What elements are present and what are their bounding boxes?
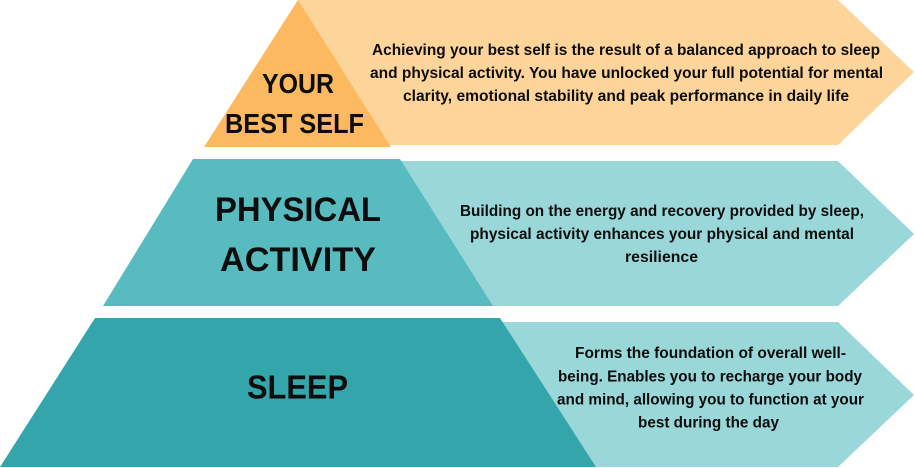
text block: sleep description: Forms the foundation of overall well-	[575, 345, 846, 362]
text block: your best self description: Achieving your best self is the result of a balanced approach to sleep	[372, 42, 880, 59]
text block: physical activity description: Building on the energy and recovery provided by sleep,	[460, 203, 864, 220]
text block: sleep description: and mind, allowing you to function at your	[557, 392, 864, 408]
heading: your best self	[225, 68, 364, 139]
heading: physical activity: PHYSICAL	[215, 191, 381, 229]
pyramid tier: physical activity	[103, 159, 493, 306]
arrow: your best self description background	[298, 0, 914, 145]
heading: your best self: BEST SELF	[225, 108, 364, 139]
text block: sleep description: being. Enables you to recharge your body	[558, 368, 862, 386]
text block: physical activity description: physical activity enhances your physical and mental	[470, 226, 854, 243]
panel: sleep	[0, 318, 914, 467]
arrow: physical activity description background	[395, 161, 914, 306]
heading: your best self: YOUR	[262, 68, 334, 99]
pyramid tier: your best self	[204, 0, 391, 147]
text block: physical activity description: resilience	[625, 249, 698, 266]
text block: physical activity description	[460, 203, 864, 266]
arrow: sleep description background	[498, 322, 914, 467]
heading: physical activity: ACTIVITY	[220, 241, 376, 279]
panel: physical activity	[103, 159, 914, 306]
text block: your best self description	[370, 42, 883, 105]
text block: your best self description: and physical activity. You have unlocked your full potential for mental	[370, 65, 883, 82]
text block: sleep description: best during the day	[638, 414, 779, 432]
text block: sleep description	[557, 345, 864, 432]
text block: your best self description: clarity, emotional stability and peak performance in daily life	[403, 88, 849, 105]
heading: physical activity	[215, 191, 381, 279]
pyramid tier: sleep	[0, 318, 596, 467]
panel: your best self	[204, 0, 914, 147]
heading: sleep: SLEEP	[247, 368, 348, 406]
